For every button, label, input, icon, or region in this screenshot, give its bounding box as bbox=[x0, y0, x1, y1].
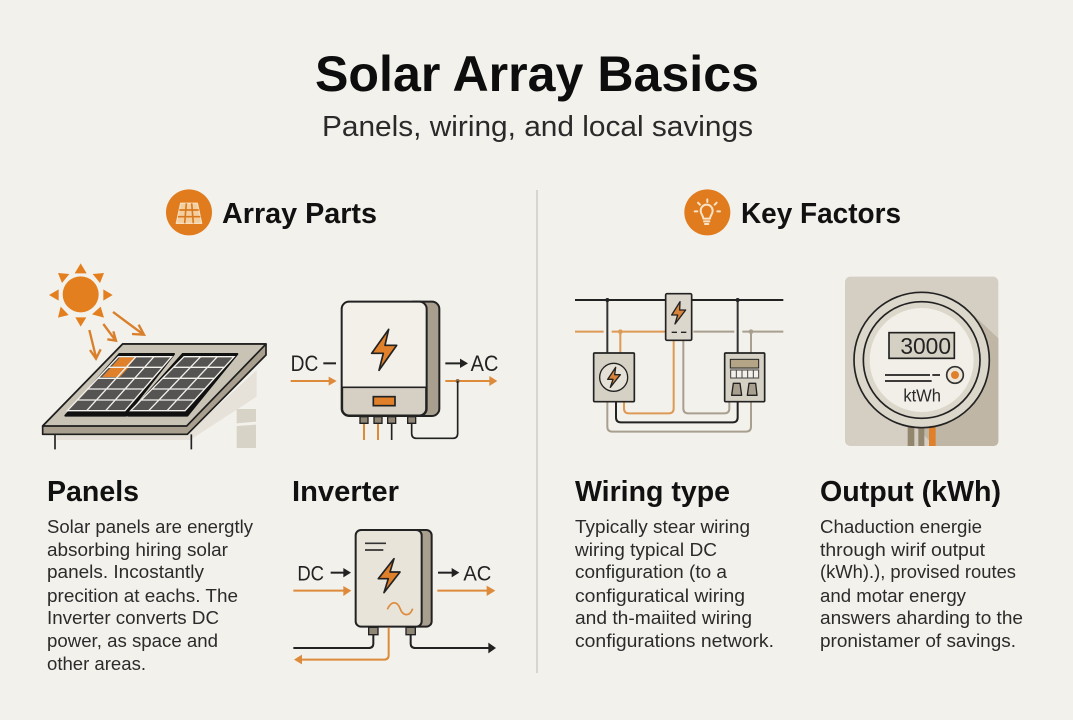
text block: Wiring type: configurations network. bbox=[575, 631, 774, 651]
section heading: Array Parts bbox=[166, 189, 377, 235]
display readout: 3000 bbox=[900, 333, 951, 359]
title: Solar Array Basics bbox=[315, 46, 759, 102]
text block: Wiring type bbox=[574, 517, 774, 651]
text block: Output: through wirif output bbox=[820, 540, 985, 560]
label: AC: AC bbox=[471, 351, 498, 376]
section heading: Key Factors bbox=[684, 189, 901, 235]
text block: Output: pronistamer of savings. bbox=[820, 631, 1016, 651]
text block: Wiring type: wiring typical DC bbox=[574, 540, 717, 560]
text block: Panels: other areas. bbox=[47, 654, 146, 674]
breaker box bbox=[594, 353, 634, 402]
column: Output heading: Output (kWh) bbox=[820, 476, 1001, 508]
text block: Output bbox=[820, 517, 1023, 651]
text block: Panels: Solar panels are energtly bbox=[47, 517, 253, 537]
text block: Output: Chaduction energie bbox=[820, 517, 982, 537]
text block: Wiring type: Typically stear wiring bbox=[575, 517, 750, 537]
label: DC: DC bbox=[297, 562, 324, 586]
text block: Panels bbox=[47, 517, 253, 674]
section heading: Key Factors: Key Factors bbox=[741, 198, 901, 230]
text block: Panels: power, as space and bbox=[47, 631, 218, 651]
meter dial bbox=[854, 292, 989, 428]
junction box bbox=[666, 294, 692, 340]
text block: Panels: panels. Incostantly bbox=[47, 562, 204, 582]
label: DC: DC bbox=[291, 351, 318, 376]
text block: Panels: Inverter converts DC bbox=[47, 608, 219, 628]
text block: Wiring type: and th-maiited wiring bbox=[575, 608, 752, 628]
text block: Panels: absorbing hiring solar bbox=[47, 540, 228, 560]
column: Panels heading: Panels bbox=[47, 476, 139, 508]
text block: Output: (kWh).), provised routes bbox=[820, 562, 1016, 582]
text block: Wiring type: configuratical wiring bbox=[575, 586, 745, 606]
label: ktWh: ktWh bbox=[903, 386, 941, 406]
indicator knob bbox=[947, 367, 963, 383]
solar panel right bbox=[128, 354, 237, 416]
wires bbox=[575, 298, 783, 432]
text block: Wiring type: configuration (to a bbox=[575, 562, 728, 582]
inverter box bbox=[342, 302, 439, 416]
roof slab bbox=[43, 344, 266, 434]
illustration: wiring diagram bbox=[575, 294, 783, 432]
text block: Panels: precition at eachs. The bbox=[47, 586, 238, 606]
illustration: inverter with DC and AC bbox=[291, 302, 498, 440]
column: Inverter heading: Inverter bbox=[292, 476, 399, 508]
illustration: kWh meter bbox=[845, 277, 998, 446]
sun rays bbox=[89, 312, 144, 359]
label: AC: AC bbox=[463, 562, 491, 586]
text block: Output: and motar energy bbox=[820, 586, 966, 606]
solar panel left bbox=[65, 354, 174, 416]
section heading: Array Parts: Array Parts bbox=[222, 198, 377, 230]
meter box bbox=[725, 353, 765, 402]
icon: sun bbox=[49, 263, 113, 327]
illustration: sun and solar panels on roof bbox=[43, 263, 266, 449]
icon: light bulb bbox=[684, 189, 730, 235]
illustration: second inverter diagram bbox=[293, 530, 496, 664]
wires bbox=[908, 425, 936, 446]
subtitle: Panels, wiring, and local savings bbox=[322, 111, 753, 143]
arrows and wiring bbox=[293, 568, 496, 664]
icon: lightning bolt bbox=[378, 559, 400, 593]
roof shadow and wall bbox=[57, 370, 257, 440]
icon: solar grid bbox=[166, 189, 212, 235]
arrows and wiring bbox=[291, 359, 497, 440]
meter backing card bbox=[845, 277, 998, 446]
icon: lightning bolt bbox=[372, 329, 397, 370]
inverter box bbox=[356, 530, 432, 627]
text block: Output: answers aharding to the bbox=[820, 608, 1023, 628]
column: Wiring type heading: Wiring type bbox=[575, 476, 730, 508]
